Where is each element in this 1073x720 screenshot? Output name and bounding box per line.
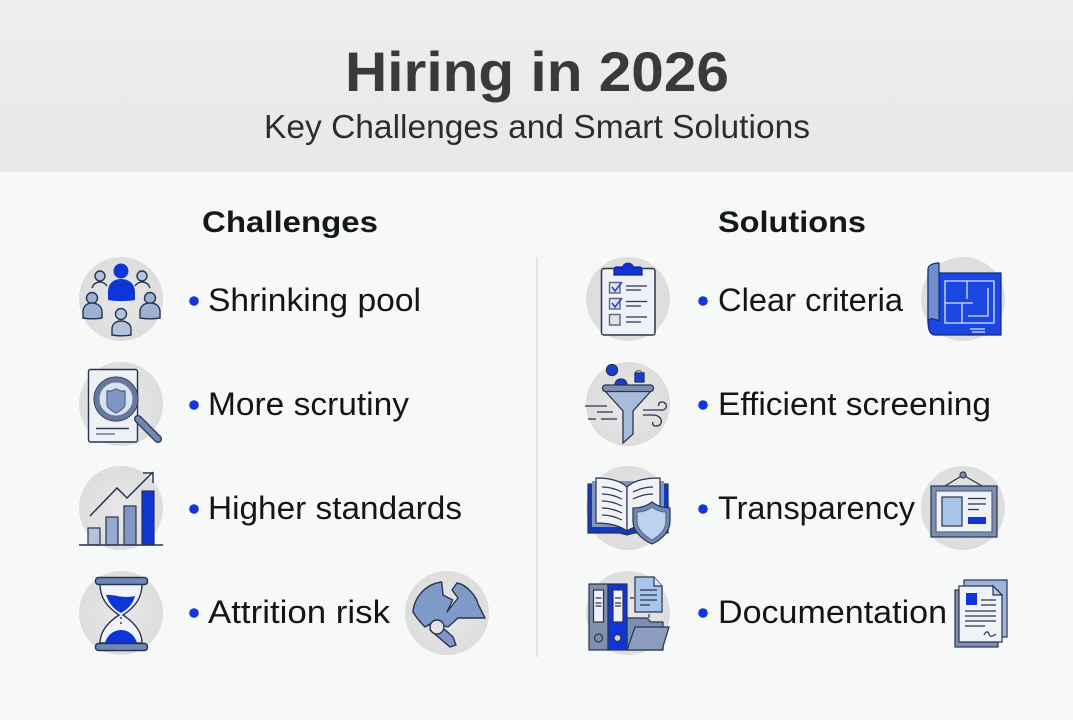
item: documentation: Documentation [718,594,947,630]
icon: candidate group [79,257,163,341]
panel: solutions [585,206,1007,655]
icon: document under magnifier [79,362,163,446]
icon: filter funnel [585,362,670,446]
title: Hiring in 2026 [345,40,729,103]
bullet [698,504,708,514]
bullet [698,400,708,410]
bullet [189,296,199,306]
bullet [698,296,708,306]
header band [0,0,1073,172]
panel: challenges [79,206,489,655]
item: efficient screening: Efficient screening [718,386,991,422]
item: more scrutiny: More scrutiny [208,386,409,422]
icon: binders and folder [586,571,670,655]
item: shrinking pool: Shrinking pool [208,282,421,318]
icon: document stack [955,580,1007,647]
icon: rising bar chart [79,466,163,550]
bullet [189,504,199,514]
subtitle: Key Challenges and Smart Solutions [264,108,810,145]
icon: cracked helmet [405,571,489,655]
icon: book with shield [586,466,670,550]
item: transparency: Transparency [718,490,915,526]
icon: blueprint [921,257,1005,341]
icon: clipboard checklist [586,257,670,341]
item: clear criteria: Clear criteria [718,282,903,318]
challenges heading: Challenges [202,206,378,239]
icon: hourglass [79,571,163,655]
item: attrition risk: Attrition risk [208,594,391,630]
item: higher standards: Higher standards [208,490,462,526]
icon: notice board [921,466,1005,550]
bullet [698,608,708,618]
solutions heading: Solutions [718,206,866,239]
bullet [189,400,199,410]
bullet [189,608,199,618]
